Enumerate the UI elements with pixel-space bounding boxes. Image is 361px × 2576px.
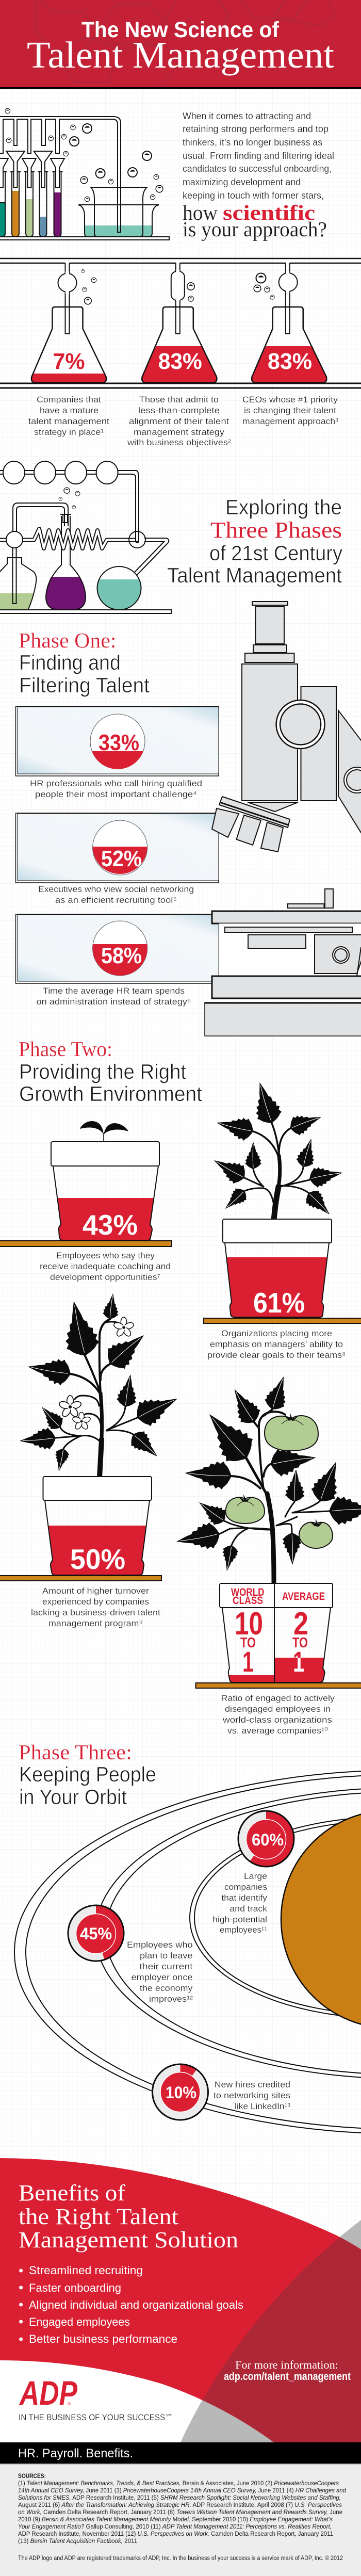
sources heading: SOURCES:	[18, 2472, 46, 2480]
ADP logo: ®	[68, 2402, 71, 2406]
benefits heading: Benefits of	[19, 2180, 125, 2206]
ADP logo: ADP	[19, 2374, 78, 2412]
ratio 2 to 1: TO	[292, 1634, 308, 1650]
tomato plant	[174, 1373, 361, 1584]
source list: (13) Bersin Talent Acquisition Factbook, 2011	[18, 2538, 137, 2545]
ratio 2 to 1: 1	[293, 1645, 304, 1678]
caption: alignment	[127, 395, 231, 447]
flowering plant	[19, 1292, 183, 1478]
sprout	[80, 1121, 128, 1142]
heading: phase two	[19, 1037, 203, 1106]
caption 45%	[127, 1940, 193, 2004]
green flask	[0, 558, 36, 610]
caption: CEOs: CEOs whose #1 priority	[242, 395, 338, 404]
source list: Your Engagement Ratio? Gallup Consulting, 2010 (11) ADP Talent Management 2011: Perceptions vs. Realities Report,	[18, 2524, 332, 2530]
caption 60%: companies	[224, 1882, 267, 1892]
black band: HR. Payroll. Benefits.	[18, 2447, 133, 2460]
intro paragraph: maximizing development and	[183, 176, 301, 187]
stage and base	[205, 889, 361, 1036]
gauge 52%: 52%	[101, 846, 142, 871]
caption	[36, 986, 191, 1007]
sources panel	[0, 2464, 361, 2576]
caption 45%: their current	[139, 1962, 193, 1971]
caption	[31, 1586, 160, 1628]
title	[27, 18, 334, 76]
intro paragraph: candidates to successful onboarding,	[183, 163, 332, 174]
question callout: how	[183, 201, 218, 224]
source list: 14th Annual CEO Survey, June 2011 (3) PricewaterhouseCoopers 14th Annual CEO Survey, June 2011 (4) HR Challenges and	[18, 2488, 347, 2494]
trademark note: The ADP logo and ADP are registered trademarks of ADP, Inc. In the business of your success is a service mark of ADP, Inc. © 2012	[18, 2555, 343, 2562]
caption 60%: high-potential	[212, 1915, 267, 1924]
flask 83% alignment: 83%	[158, 349, 202, 374]
caption: CEOs	[242, 395, 338, 426]
caption: alignment: alignment of their talent	[129, 416, 229, 426]
flask 7%: 7%	[53, 349, 85, 374]
teal flask	[97, 566, 141, 610]
benefits panel	[0, 2158, 361, 2442]
panel: slide 52%	[15, 813, 219, 905]
benefits list: Engaged employees	[29, 2315, 130, 2328]
question callout: is your approach?	[183, 217, 327, 241]
gauge 52%	[93, 820, 147, 875]
caption: HR professionals who call hiring qualified	[30, 779, 202, 788]
plant pot 50%	[0, 1292, 183, 1628]
caption 60%: employees¹¹	[220, 1925, 267, 1935]
heading: three phases	[167, 495, 342, 587]
flask stats panel	[0, 258, 361, 447]
caption 10%: to networking sites	[214, 2091, 290, 2100]
caption: CEOs: management approach³	[242, 416, 338, 426]
heading: phase two: Phase Two:	[19, 1037, 112, 1061]
question callout	[183, 201, 327, 241]
caption: alignment: less-than-complete	[138, 406, 220, 415]
title: Talent Management	[27, 34, 334, 76]
benefits list: Faster onboarding	[29, 2281, 121, 2294]
ratio 2 to 1	[292, 1612, 307, 1672]
objective lenses	[212, 797, 298, 852]
caption	[40, 1251, 171, 1282]
gauge 33%	[90, 714, 145, 769]
gauge 45%: 45%	[80, 1924, 112, 1943]
heading: phase two: Providing the Right	[19, 1060, 187, 1083]
caption	[207, 1328, 346, 1360]
panel: slide 33%	[15, 706, 219, 799]
caption: Ratio of engaged to actively	[221, 1693, 335, 1703]
source list: 2010 (9) Bersin & Associates Talent Management Maturity Model, September 2010 (10) Employee Engagement: What’s	[18, 2517, 333, 2523]
source list	[18, 2481, 347, 2545]
benefits list: Streamlined recruiting	[29, 2264, 143, 2277]
caption: people their most important challenge⁴	[35, 789, 197, 799]
heading: three phases: Three Phases	[210, 517, 342, 543]
caption: Executives who view social networking	[38, 884, 194, 894]
more information: For more information:	[235, 2358, 338, 2371]
header banner	[0, 0, 361, 87]
caption: lacking a business-driven talent	[31, 1608, 160, 1617]
benefits list: Better business performance	[29, 2332, 177, 2345]
arm	[338, 710, 361, 841]
gauge 58%: 58%	[101, 943, 142, 968]
intro paragraph	[183, 110, 334, 241]
orbit diagram	[14, 1770, 361, 2134]
caption 60%: and track	[230, 1904, 268, 1914]
flask 7%	[31, 262, 106, 383]
caption 45%: plan to leave	[140, 1951, 193, 1961]
purple flask	[46, 514, 86, 610]
apparatus bubbles	[59, 488, 80, 509]
caption: mature strategy: strategy in place¹	[34, 427, 104, 437]
illustration: distillation apparatus	[0, 461, 171, 613]
heading: phase two: Growth Environment	[19, 1082, 203, 1106]
title: The New Science of	[81, 18, 280, 42]
gauge 10%	[153, 2064, 208, 2120]
heading: three phases: of 21st Century	[209, 541, 342, 565]
rack lines	[0, 258, 361, 263]
focus wheel	[276, 687, 325, 801]
caption: development opportunities⁷	[50, 1272, 160, 1282]
heading: phase three: in Your Orbit	[19, 1785, 127, 1809]
heading: phase three: Phase Three:	[19, 1740, 132, 1764]
caption: experienced by companies	[42, 1597, 149, 1607]
gauge 45%	[68, 1905, 124, 1961]
illustration: test tubes and beakers	[0, 108, 169, 240]
benefits heading: Management Solution	[19, 2227, 238, 2253]
plant pot 61%: 61%	[253, 1287, 305, 1319]
source list: August 2011 (6) After the Transformation: Achieving Strategic HR, ADP Research Institute, April 2008 (7) U.S. Perspectives	[18, 2502, 342, 2508]
caption: mature strategy	[28, 395, 109, 437]
panel: slide 58%	[15, 914, 219, 1007]
caption: management program⁹	[48, 1618, 143, 1628]
flask 83% alignment	[142, 262, 217, 383]
column labels: WORLD	[231, 1586, 264, 1598]
heading: phase one: Filtering Talent	[19, 673, 150, 697]
gauge 60%: 60%	[252, 1830, 284, 1849]
plant pot 61%	[204, 1079, 361, 1360]
heading: three phases: Exploring the	[225, 495, 342, 519]
caption: on administration instead of strategy⁶	[36, 997, 191, 1007]
heading: phase three: Keeping People	[19, 1762, 156, 1786]
intro paragraph: keeping in touch with former stars,	[183, 190, 324, 201]
coil and connecting tubes	[0, 503, 171, 613]
source list: (1) Talent Management: Benchmarks, Trends, & Best Practices, Bersin & Associates, June 2010 (2) PricewaterhouseCoopers	[18, 2481, 339, 2487]
test tube rack tubing	[0, 117, 121, 232]
caption: Time the average HR team spends	[43, 986, 185, 996]
heading: phase one	[19, 628, 150, 697]
caption: provide clear goals to their teams⁸	[207, 1350, 346, 1360]
caption: mature strategy: Companies that	[37, 395, 101, 404]
caption	[38, 884, 194, 905]
caption 45%: Employees who	[127, 1940, 193, 1950]
ratio 10 to 1: 1	[242, 1645, 254, 1678]
intro paragraph: retaining strong performers and top	[183, 123, 329, 134]
plant	[209, 1079, 344, 1221]
caption: alignment: Those that admit to	[139, 395, 219, 404]
heading: phase one: Phase One:	[19, 628, 117, 652]
beakers	[78, 187, 159, 237]
flask 83% CEOs: 83%	[268, 349, 312, 374]
caption: CEOs: is changing their talent	[244, 406, 336, 415]
caption 10%	[214, 2080, 290, 2111]
tomatoes	[226, 1413, 333, 1548]
caption: alignment: management strategy	[134, 427, 225, 437]
heading: phase three	[19, 1740, 156, 1809]
ratio 10 to 1: TO	[240, 1634, 256, 1650]
caption: disengaged employees in	[225, 1704, 331, 1714]
orbit rings	[14, 1770, 361, 2134]
caption: Amount of higher turnover	[42, 1586, 149, 1596]
heading: three phases: Talent Management	[167, 563, 342, 587]
caption	[30, 779, 202, 799]
gauge 33%: 33%	[99, 730, 139, 755]
benefits list	[19, 2264, 243, 2345]
caption: emphasis on managers’ ability to	[210, 1339, 343, 1349]
caption 45%: the economy	[140, 1983, 193, 1993]
flask 83% CEOs	[252, 262, 326, 383]
intro paragraph: usual. From finding and filtering ideal	[183, 150, 334, 161]
caption: alignment: with business objectives²	[127, 438, 231, 447]
caption: mature strategy: have a mature	[40, 406, 99, 415]
illustration: microscope	[205, 602, 361, 1036]
bubbles	[5, 108, 163, 202]
caption: world-class organizations	[222, 1715, 332, 1725]
caption	[221, 1693, 335, 1736]
ratio 10 to 1: 10	[235, 1606, 263, 1642]
shelf	[0, 237, 169, 240]
heading: phase one: Finding and	[19, 651, 121, 674]
caption: mature strategy: talent management	[28, 416, 109, 426]
caption 60%: Large	[244, 1871, 267, 1881]
intro paragraph: When it comes to attracting and	[183, 110, 311, 121]
funnels	[0, 151, 64, 187]
black band	[0, 2442, 361, 2464]
caption 10%: New hires credited	[215, 2080, 290, 2089]
more information	[224, 2358, 351, 2383]
caption: vs. average companies¹⁰	[227, 1726, 328, 1736]
caption 10%: like LinkedIn¹³	[235, 2101, 290, 2111]
column labels	[231, 1586, 325, 1607]
caption 60%: that identify	[222, 1893, 267, 1903]
question callout: scientific	[223, 201, 315, 224]
caption 45%: employer once	[131, 1972, 193, 1982]
caption 60%	[212, 1871, 268, 1935]
flask bubbles	[81, 269, 274, 304]
intro paragraph: thinkers, it’s no longer business as	[183, 137, 322, 148]
benefits heading	[19, 2180, 238, 2253]
benefits heading: the Right Talent	[19, 2204, 178, 2229]
plant pot ratio	[174, 1373, 361, 1736]
plant pot 43%	[0, 1121, 172, 1282]
caption: as an efficient recruiting tool⁵	[55, 895, 177, 905]
caption 45%: improves¹²	[149, 1994, 193, 2004]
caption: Organizations placing more	[221, 1328, 332, 1338]
column labels: CLASS	[233, 1595, 263, 1607]
source list: ADP Research Institute, November 2011 (12) U.S. Perspectives on Work, Camden Delta Research Report, January 2011	[18, 2531, 333, 2537]
gauge 58%	[93, 921, 147, 976]
ratio 10 to 1	[235, 1606, 263, 1678]
gauge 10%: 10%	[166, 2083, 196, 2102]
plant pot 50%: 50%	[70, 1543, 125, 1575]
tagline: IN THE BUSINESS OF YOUR SUCCESS℠	[19, 2412, 173, 2422]
caption: receive inadequate coaching and	[40, 1261, 171, 1271]
source list: on Work, Camden Delta Research Report, January 2011 (8) Towers Watson Talent Management and Rewards Survey, June	[18, 2509, 342, 2516]
sun	[281, 1810, 361, 2028]
plant pot 43%: 43%	[83, 1209, 138, 1241]
ratio 2 to 1: 1	[293, 1645, 304, 1678]
gauge 60%	[238, 1811, 294, 1867]
ratio 2 to 1: 2	[293, 1606, 308, 1642]
caption: Employees who say they	[56, 1251, 155, 1260]
column labels: AVERAGE	[282, 1591, 325, 1602]
test tubes	[0, 172, 63, 237]
condenser bulbs and tubing	[0, 471, 139, 542]
benefits list: Aligned individual and organizational goals	[29, 2298, 243, 2311]
source list: Solutions for SMES, ADP Research Institute, 2011 (5) SHRM Research Spotlight: Social Networking Websites and Staffing,	[18, 2495, 341, 2501]
